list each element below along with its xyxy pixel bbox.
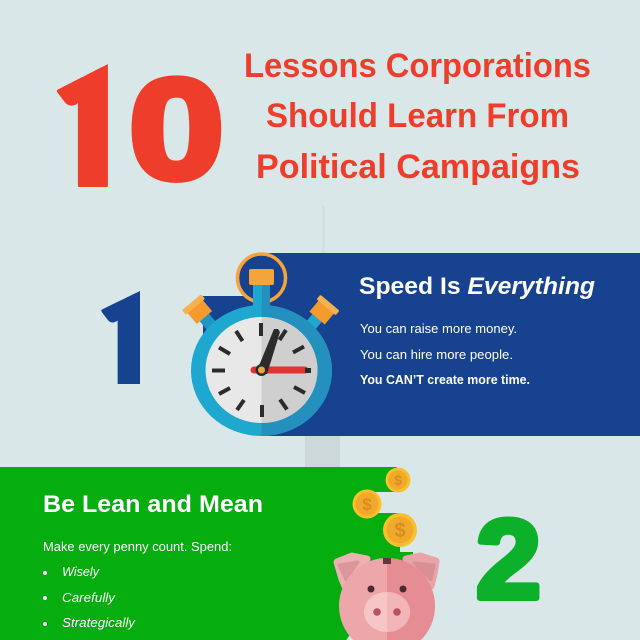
icon: stopwatch — [182, 254, 340, 436]
panel: speed is everything — [203, 253, 640, 436]
snout — [364, 592, 410, 632]
icon: coins — [352, 468, 417, 547]
body — [339, 558, 435, 640]
big number 10: 1 — [44, 47, 136, 211]
big number 10 — [57, 64, 222, 187]
number 1: 1 — [92, 278, 162, 403]
big number 10: 0 — [129, 50, 224, 209]
right button — [299, 295, 340, 336]
text: speed body — [360, 321, 530, 387]
panel background — [203, 253, 640, 436]
list: spending: Wisely — [62, 564, 100, 579]
heading: speed: Speed Is Everything — [359, 273, 595, 300]
title — [244, 47, 591, 186]
list: spending: Strategically — [62, 615, 137, 630]
clock ticks — [212, 323, 305, 417]
heading: lean: Be Lean and Mean — [43, 491, 263, 518]
icon: coins: $ — [394, 472, 402, 488]
text: speed body: You can hire more people. — [360, 347, 513, 362]
list: spending — [43, 564, 137, 630]
eyes — [368, 586, 374, 592]
left button — [182, 294, 222, 336]
number 2: 2 — [476, 497, 541, 622]
title: Political Campaigns — [256, 148, 580, 186]
icon: piggy bank — [337, 556, 436, 640]
panel background — [0, 467, 413, 640]
text: speed body: You CAN’T create more time. — [360, 372, 530, 387]
panel: be lean and mean — [0, 467, 413, 640]
list: spending: Carefully — [62, 590, 117, 605]
icon: coins: $ — [394, 520, 406, 542]
coin slot — [383, 558, 391, 564]
black hand — [256, 329, 280, 374]
text: lean body: Make every penny count. Spend: — [43, 539, 232, 554]
title: Should Learn From — [266, 97, 569, 135]
title: Lessons Corporations — [244, 47, 591, 85]
red hand — [254, 366, 305, 374]
text: speed body: You can raise more money. — [360, 321, 517, 336]
ears — [337, 556, 367, 586]
icon: coins: $ — [362, 495, 372, 514]
